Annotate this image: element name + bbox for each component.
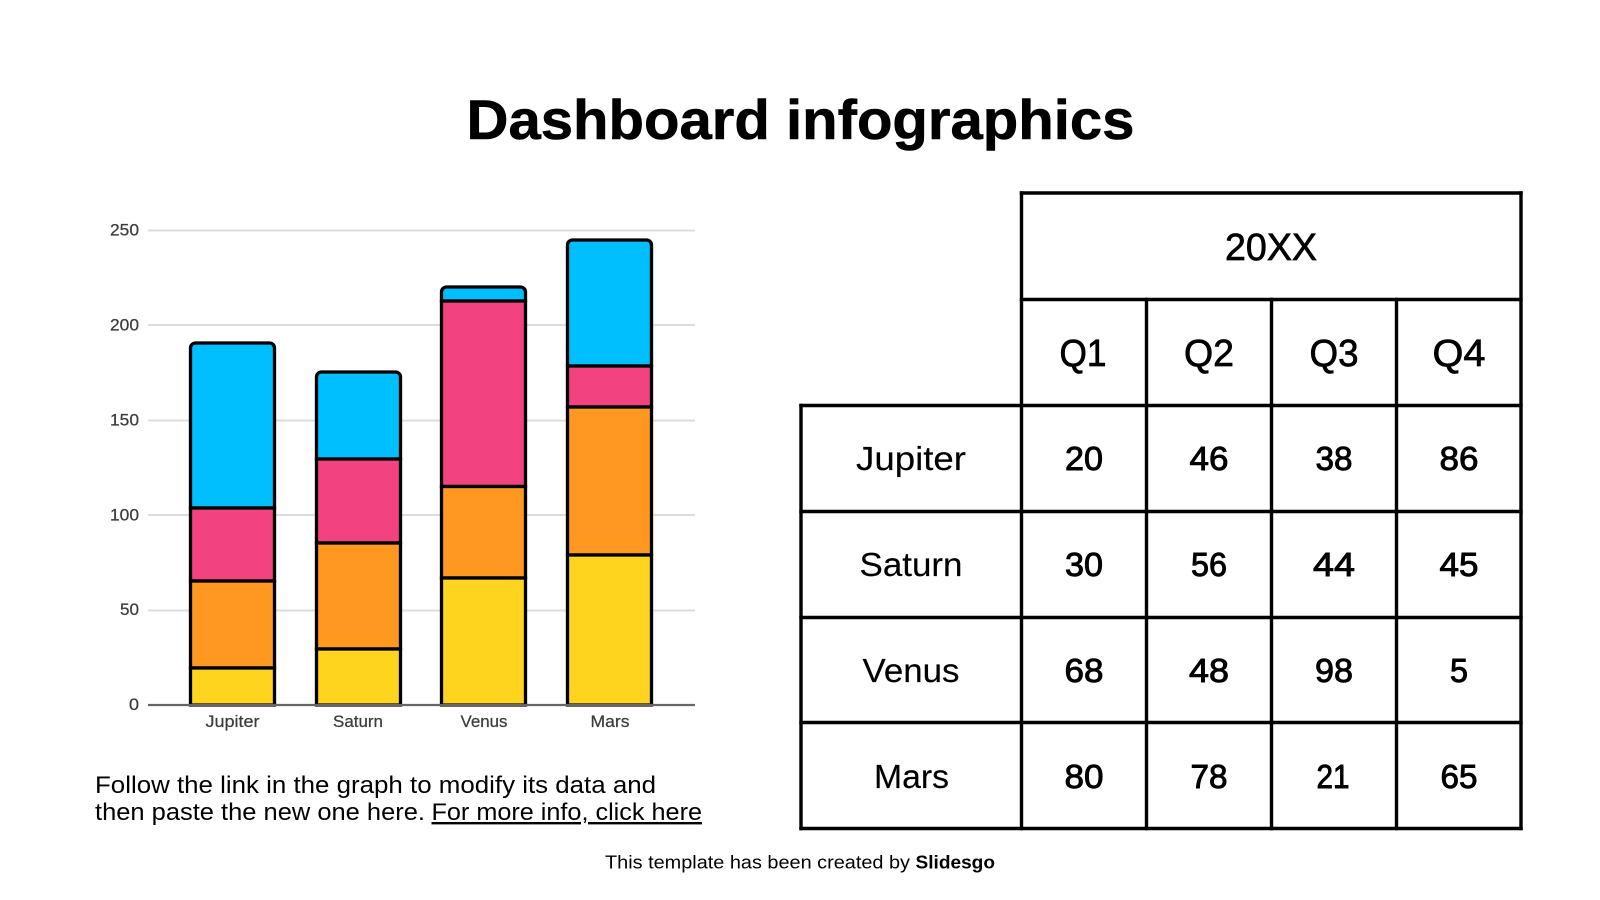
row: Jupiter: 86 [1440,440,1478,477]
footer credit: Slidesgo [916,852,995,872]
y axis labels: 50 [120,600,139,619]
title: Dashboard infographics [466,88,1134,151]
y axis labels: 150 [110,410,139,430]
row: Venus: Venus [862,652,960,689]
row: Venus: 48 [1189,652,1229,689]
row: Jupiter: 46 [1190,440,1228,477]
row: Venus: 98 [1315,652,1353,689]
data table [801,193,1521,828]
description text block: Follow the link in the graph to modify its data and [95,772,656,799]
x axis labels: Jupiter [206,712,260,731]
row: Mars: 78 [1190,758,1228,795]
row: Jupiter: 38 [1316,440,1352,477]
x axis labels: Saturn [333,712,383,731]
y axis labels [110,220,139,714]
quarter headers: Q4 [1432,333,1486,375]
row: Mars: 80 [1064,758,1104,795]
row: Venus [862,652,1468,689]
quarter headers: Q1 [1060,333,1106,375]
quarter headers: Q2 [1184,333,1234,375]
row: Saturn: 44 [1313,546,1355,583]
row: Jupiter [856,440,1478,477]
y axis labels: 100 [110,506,139,524]
y axis labels: 0 [129,695,139,714]
row: Venus: 68 [1064,652,1104,689]
year header: 20XX [1225,227,1317,269]
row: Venus: 5 [1450,652,1468,689]
description text block: then paste the new one here. [95,799,425,826]
row: Mars: 65 [1440,758,1478,795]
table grid [801,193,1521,828]
row: Mars [874,758,1478,795]
bar: Mars [568,240,652,705]
description text block: For more info, click here [432,799,702,826]
row: Jupiter: Jupiter [856,440,966,477]
footer credit: This template has been created by [605,852,911,872]
row: Mars: Mars [874,758,949,795]
bar: Saturn [316,372,400,705]
row: Saturn [860,546,1478,583]
x axis labels: Mars [590,712,630,731]
row: Jupiter: 20 [1065,440,1103,477]
x axis labels [206,712,630,731]
x axis labels: Venus [460,712,508,731]
quarter headers: Q3 [1310,333,1358,375]
row: Saturn: 45 [1440,546,1478,583]
stacked bar chart [110,220,695,731]
bar: Venus [442,287,526,705]
row: Saturn: 56 [1191,546,1227,583]
y axis labels: 200 [110,316,139,334]
description text block [95,772,702,826]
quarter headers [1060,333,1486,375]
bar: Jupiter [190,343,274,705]
row: Saturn: 30 [1065,546,1103,583]
y axis labels: 250 [110,220,139,240]
row: Mars: 21 [1316,758,1350,795]
row: Saturn: Saturn [860,546,962,583]
